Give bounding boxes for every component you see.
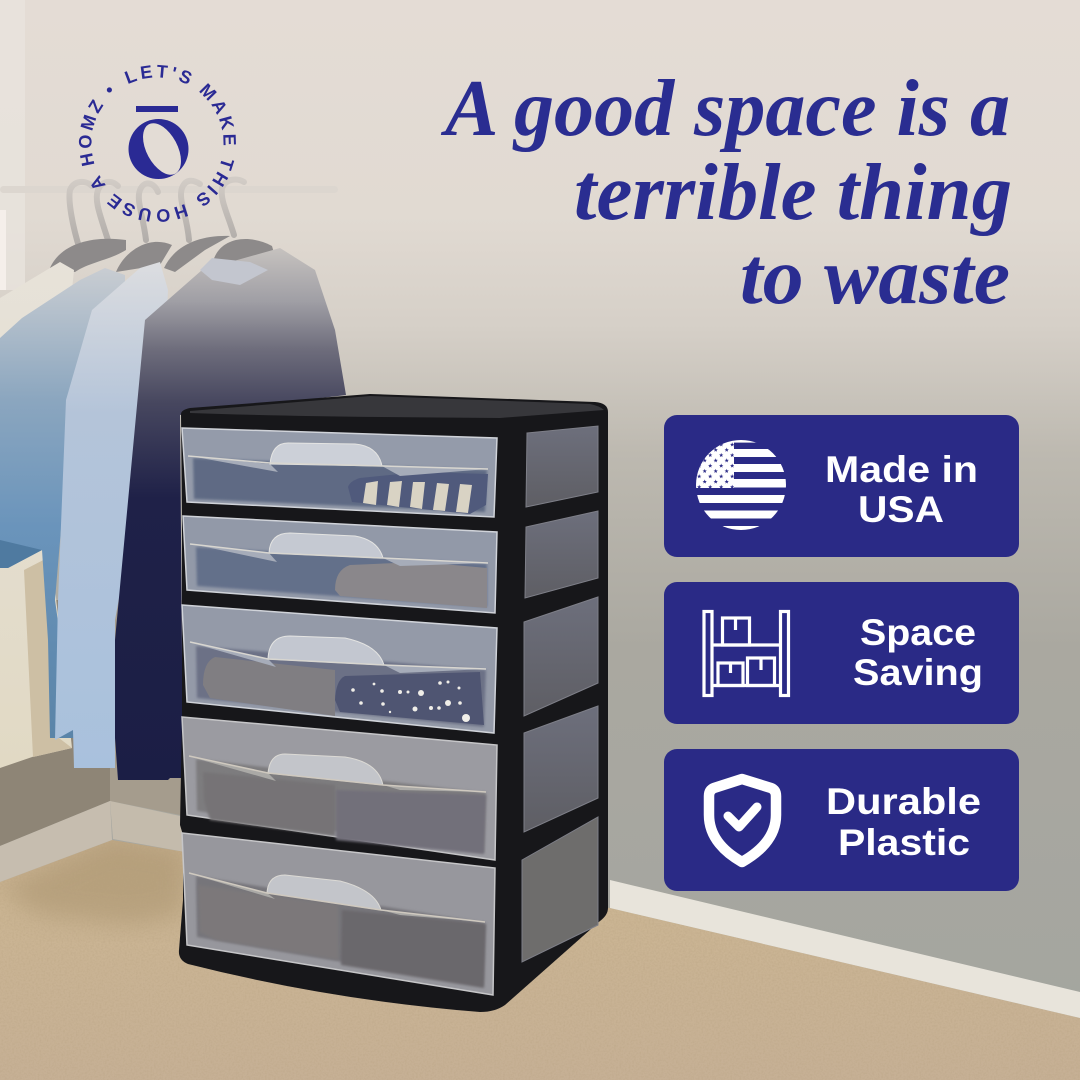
- rim wedges: [190, 456, 488, 476]
- headline: terrible thing: [574, 147, 1012, 237]
- rim wedges: [192, 643, 486, 673]
- floor carpet: [0, 830, 1080, 1080]
- drawer 5: [182, 833, 495, 995]
- shirt: light blue: [55, 262, 168, 768]
- headline: to waste: [740, 231, 1010, 321]
- side panels: [522, 426, 598, 962]
- logo macron bar: [136, 106, 178, 112]
- icon: shield with check: [709, 779, 776, 862]
- shirt: navy sweater: [115, 248, 346, 780]
- circular slogan: LET'S MAKE THIS HOUSE A HOMZ •: [78, 64, 236, 222]
- label: [825, 449, 978, 530]
- dresser top surface: [190, 396, 604, 418]
- label: USA: [858, 489, 944, 530]
- grey cloth: [203, 657, 335, 716]
- rolled grey cloth: [335, 562, 487, 608]
- dresser frame: [179, 394, 608, 1012]
- headline: [440, 63, 1012, 321]
- collar: [200, 258, 268, 285]
- drawer 3 contents: [196, 646, 486, 727]
- badge: Space Saving: [664, 582, 1019, 724]
- label: [826, 781, 981, 863]
- badge: Durable Plastic: [664, 749, 1019, 891]
- handle: [268, 636, 384, 665]
- label: Durable: [826, 781, 981, 822]
- label: Made in: [825, 449, 978, 490]
- drawer 5 contents: [196, 876, 485, 986]
- drawer 4 contents: [196, 759, 486, 853]
- baseboards: [0, 801, 1080, 1018]
- denim sleeve cuff: [0, 540, 42, 568]
- shirt: tan lining: [24, 555, 72, 757]
- star cloth: [335, 672, 484, 725]
- hangers: [69, 180, 244, 250]
- hanger shoulders: [50, 236, 276, 272]
- logo badge: [78, 64, 236, 222]
- drawer 1: [182, 428, 497, 517]
- icon: US flag: [696, 440, 786, 531]
- rim wedges: [191, 874, 485, 922]
- icon: storage shelf: [704, 612, 788, 696]
- label: Saving: [853, 652, 983, 693]
- rim wedges: [192, 544, 488, 566]
- handle: [268, 754, 383, 785]
- label: [853, 612, 983, 693]
- drawer 4: [182, 717, 497, 860]
- shirt: cream: [0, 262, 74, 768]
- label: Space: [860, 612, 976, 653]
- closet rod: [0, 186, 338, 193]
- drawer 2: [183, 516, 497, 613]
- drawer 1 contents: [193, 458, 487, 512]
- badge: Made in USA: [664, 415, 1019, 557]
- drawer 2 contents: [196, 547, 487, 607]
- handle: [270, 443, 382, 466]
- handle: [267, 875, 381, 910]
- rim wedges: [191, 757, 486, 792]
- drawer 3: [182, 605, 497, 733]
- shirt: denim: [0, 268, 125, 738]
- headline: A good space is a: [440, 63, 1010, 153]
- label: Plastic: [838, 822, 970, 863]
- handle: [269, 533, 383, 558]
- logo ring: [128, 117, 189, 181]
- folded checkered cloth: [348, 472, 488, 514]
